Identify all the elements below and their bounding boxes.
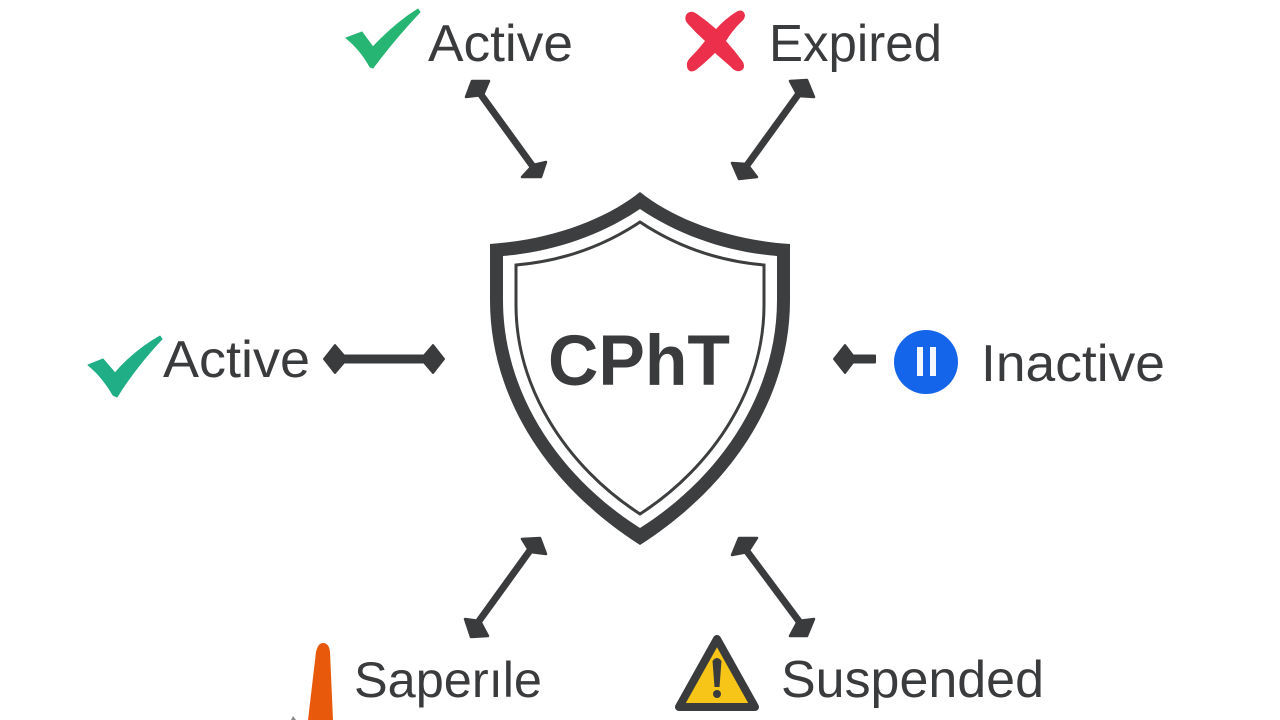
label: Expired (769, 15, 942, 73)
arrow: left connector (324, 345, 444, 373)
status: suspended (679, 639, 1044, 709)
shield title: CPhT (548, 322, 730, 401)
status: expired (685, 11, 942, 73)
icon: orange cone (291, 643, 333, 720)
arrow: top right connector (732, 80, 814, 179)
arrow: bottom right connector (732, 538, 814, 636)
arrow: bottom left connector (465, 538, 546, 637)
label: Suspended (781, 651, 1044, 709)
label: Saperıle (354, 652, 542, 708)
label: Inactive (981, 335, 1165, 393)
status: cropped bottom label (291, 643, 542, 720)
label: Active (163, 331, 310, 389)
status: inactive (894, 330, 1165, 394)
arrow: right connector (834, 345, 875, 373)
icon: green check (346, 9, 420, 68)
icon: blue pause (894, 330, 958, 394)
shield inner line (516, 222, 764, 514)
arrow: top left connector (466, 81, 546, 177)
label: Active (428, 15, 573, 73)
icon: warning triangle (679, 639, 755, 707)
icon: red cross (685, 11, 745, 71)
icon: teal check (88, 336, 162, 397)
shield: CPhT badge (490, 192, 790, 545)
status: active left (88, 331, 310, 397)
status: active top (346, 9, 573, 73)
shield outer band (490, 192, 790, 545)
